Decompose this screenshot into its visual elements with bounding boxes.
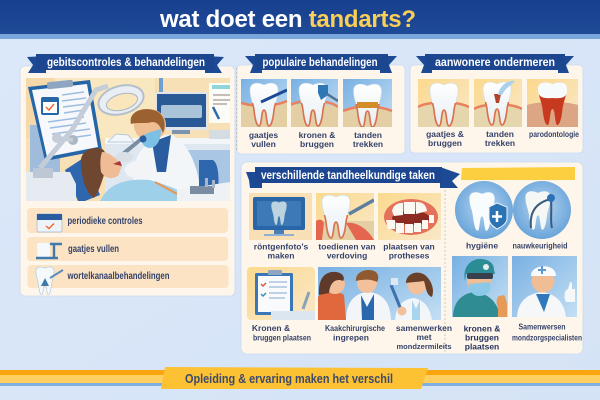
image: gaatjes vullen tooth	[241, 79, 287, 127]
label: kronen en bruggen plaatsen: bruggen	[465, 332, 499, 342]
ribbon heading: verschillende taken	[246, 167, 460, 188]
icon: nauwkeurigheid tooth with tool	[513, 181, 571, 239]
patient in chair	[65, 148, 218, 201]
image: clipboard	[247, 267, 315, 320]
ribbon heading: aanwonere ondermeren: aanwonere ondermeren	[435, 55, 555, 69]
x-ray monitor	[155, 92, 208, 134]
label: gaatjes en bruggen: gaatjes &	[426, 129, 464, 139]
image: röntgen monitor	[249, 193, 312, 240]
label: hygiëne: hygiëne	[466, 240, 498, 250]
label: röntgenfoto's maken: maken	[268, 250, 294, 260]
label: nauwkeurigheid: nauwkeurigheid	[512, 240, 568, 250]
label: kronen en bruggen: bruggen	[300, 139, 334, 149]
label: samenwerken met mondzermileits: samenwerken	[396, 323, 452, 333]
label: plaatsen van protheses: plaatsen van	[383, 242, 435, 252]
dentist	[115, 109, 202, 201]
image: tanden trekken tooth	[343, 79, 392, 127]
ribbon heading: populaire behandelingen: populaire behandelingen	[262, 55, 378, 69]
instrument trays	[26, 168, 230, 201]
list item: periodieke controles: periodieke controles	[68, 216, 143, 227]
label: plaatsen van protheses: protheses	[389, 250, 430, 260]
ribbon heading: populaire behandelingen	[245, 54, 397, 73]
label: gaatjes en bruggen: bruggen	[428, 138, 462, 148]
label: Kronen en bruggen plaatsen: Kronen &	[252, 323, 290, 333]
illustration: dentist treating patient	[26, 78, 230, 201]
image: kronen en bruggen tooth	[291, 79, 338, 127]
ribbon heading: gebitscontroles: gebitscontroles & behandelingen	[47, 55, 205, 69]
label: röntgenfoto's maken: röntgenfoto's	[254, 242, 308, 252]
label: ingrepen: ingrepen	[333, 332, 369, 342]
label: samenwerken met mondzermileits: mondzermileits	[396, 342, 452, 351]
label: toedienen van verdoving: verdoving	[327, 250, 367, 260]
image: dentist thumbs up	[512, 256, 577, 317]
label: Samenwersen: Samenwersen	[518, 322, 566, 332]
list item: gaatjes vullen	[27, 237, 228, 261]
label: Kronen en bruggen plaatsen: bruggen plaatsen	[253, 332, 311, 342]
image: team with patient	[318, 267, 441, 320]
label: kronen en bruggen: kronen &	[299, 130, 335, 140]
label: tanden trekken: tanden	[354, 130, 382, 140]
icon: root canal tooth	[36, 267, 63, 295]
title: wat doet een tandarts?	[159, 6, 416, 33]
label: samenwerken met mondzermileits: met	[416, 332, 432, 342]
dental lamp	[40, 81, 147, 168]
image: gaatjes en bruggen tooth	[418, 79, 469, 127]
panel: verschillende tandheelkundige taken	[241, 162, 583, 354]
label: tanden trekken: trekken	[353, 139, 383, 149]
clipboard	[28, 80, 102, 161]
image: parodontologie tooth	[527, 79, 578, 127]
ribbon heading: aanwonere ondermeren	[416, 54, 574, 73]
image: verdoving syringe	[316, 193, 374, 240]
label: gaatjes vullen: gaatjes	[249, 130, 278, 140]
image: surgeon in scrubs	[452, 256, 508, 317]
image: tanden trekken tooth with tool	[474, 79, 522, 127]
yellow accent bar	[461, 167, 575, 180]
footer banner	[0, 367, 600, 389]
label: gaatjes vullen: vullen	[251, 139, 276, 149]
label: mondzorgspecialisten: mondzorgspecialisten	[512, 332, 582, 342]
icon: hygiëne tooth with shield	[455, 181, 513, 239]
label: kronen en bruggen plaatsen: kronen &	[464, 324, 500, 334]
list item: wortelkanaalbehandelingen	[28, 265, 228, 295]
list item: periodieke controles	[27, 208, 228, 233]
icon: calendar	[37, 214, 62, 232]
panel: gebitscontroles en behandelingen	[20, 54, 235, 296]
list item: wortelkanaalbehandelingen: wortelkanaalbehandelingen	[67, 271, 170, 282]
panel: aanwonere ondermeren	[410, 54, 583, 153]
panel: populaire behandelingen	[236, 54, 405, 154]
label: parodontologie: parodontologie	[529, 129, 579, 139]
ribbon heading: verschillende taken: verschillende tandheelkundige taken	[261, 168, 435, 182]
ribbon heading: gebitscontroles	[27, 54, 224, 73]
label: tanden trekken: trekken	[485, 138, 515, 148]
icon: tooth with instrument	[36, 243, 62, 258]
title banner	[0, 0, 600, 39]
image: protheses	[378, 193, 441, 240]
footer text: Opleiding & ervaring maken het verschil	[185, 371, 393, 386]
label: kronen en bruggen plaatsen: plaatsen	[465, 342, 499, 352]
note and tools	[108, 83, 231, 142]
list item: gaatjes vullen: gaatjes vullen	[68, 244, 119, 255]
label: tanden trekken: tanden	[486, 129, 514, 139]
label: toedienen van verdoving: toedienen van	[318, 242, 376, 252]
label: Kaakchirurgische: Kaakchirurgische	[325, 323, 385, 333]
